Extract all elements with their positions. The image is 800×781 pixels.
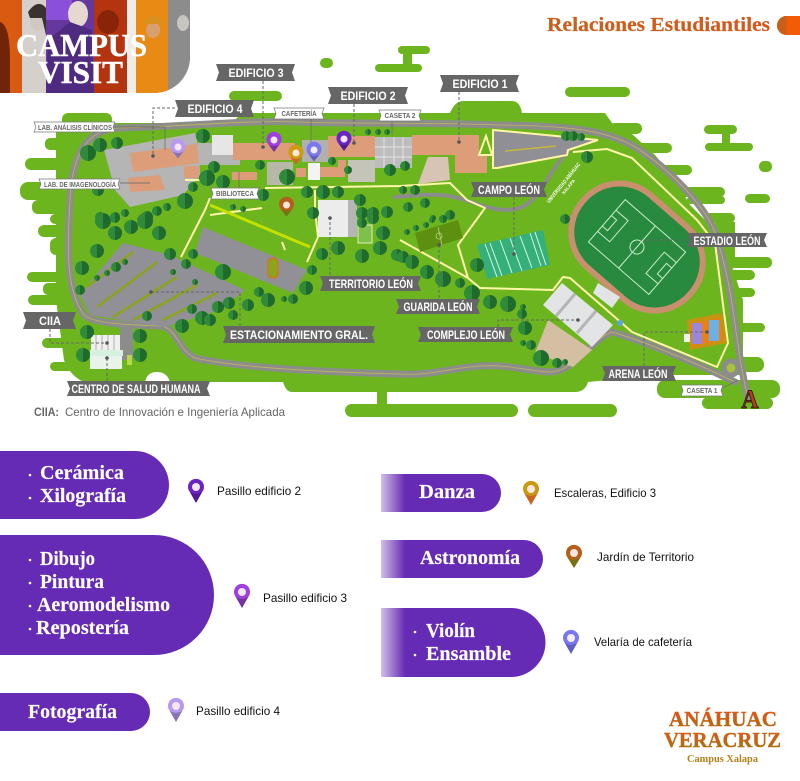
label: lab. de imagenología: [39, 179, 120, 189]
label: campo león: CAMPO LEÓN: [478, 182, 540, 197]
right fingers: [610, 123, 642, 134]
left fingers: [45, 138, 75, 150]
map pin: edificio 4: [170, 139, 186, 158]
green terrain: [20, 46, 780, 417]
trees: [75, 129, 593, 368]
label: edificio 1: EDIFICIO 1: [452, 77, 508, 91]
legend: astronomía: Jardín de Territorio: [597, 550, 694, 564]
leader dots: [105, 140, 709, 360]
label: estadio león: ESTADIO LEÓN: [694, 233, 760, 248]
legend: danza: Escaleras, Edificio 3: [554, 486, 656, 500]
pin: [563, 630, 579, 654]
label: lab. análisis clínicos: [34, 122, 115, 132]
centro de salud buildings: [90, 335, 132, 369]
label: biblioteca: BIBLIOTECA: [216, 191, 254, 198]
label: lab. análisis clínicos: LAB. ANÁLISIS CLÍNICOS: [38, 123, 112, 132]
label: edificio 3: EDIFICIO 3: [228, 66, 284, 80]
legend: velaría de cafetería: [381, 608, 692, 677]
parking lots: [80, 130, 598, 360]
legend: pasillo edificio 4: [0, 693, 280, 731]
yellow-green walkway: [210, 205, 310, 247]
universidad sign: XALAPA: [561, 178, 577, 195]
label: estacionamiento gral.: ESTACIONAMIENTO GRAL.: [230, 328, 368, 342]
universidad sign: UNIVERSIDAD ANÁHUAC: [545, 161, 582, 205]
stadium: [548, 160, 726, 334]
legend: pasillo edificio 3: [0, 535, 347, 655]
main land: [56, 101, 743, 392]
ciia note: CIIA:: [34, 405, 59, 419]
legend: pasillo edificio 2: Xilografía: [40, 486, 126, 507]
label: lab. de imagenología: LAB. DE IMAGENOLOGÍA: [44, 180, 116, 189]
legend: pasillo edificio 2: Cerámica: [40, 463, 124, 484]
legend: pasillo edificio 3: Pintura: [40, 572, 104, 593]
label: edificio 3: [216, 64, 295, 81]
label: edificio 1: [440, 75, 519, 92]
pin: [188, 479, 204, 503]
title: campus visit: VISIT: [38, 54, 123, 90]
legend: pasillo edificio 3: Repostería: [36, 618, 129, 639]
logo: anáhuac veracruz: ANÁHUAC: [669, 707, 777, 731]
walkways: [181, 149, 728, 367]
label: edificio 4: EDIFICIO 4: [188, 102, 243, 116]
ciia note: Centro de Innovación e Ingeniería Aplicada: [65, 405, 285, 419]
legend: pasillo edificio 4: Pasillo edificio 4: [196, 704, 280, 718]
title: campus visit: CAMPUS: [16, 27, 147, 63]
title: campus visit: [16, 27, 147, 90]
label: edificio 2: [328, 87, 408, 104]
legend: pasillo edificio 3: Dibujo: [40, 549, 95, 570]
logo: anáhuac veracruz: [664, 707, 781, 765]
legend: pasillo edificio 3: Aeromodelismo: [37, 595, 170, 616]
legend: pasillo edificio 2: [0, 451, 301, 519]
label: arena león: ARENA LEÓN: [608, 366, 668, 381]
pin: [168, 698, 184, 722]
label: centro de salud humana: CENTRO DE SALUD HUMANA: [72, 382, 201, 396]
label: caseta 1: CASETA 1: [686, 388, 718, 395]
arena león courts: [684, 313, 727, 350]
legend: astronomía: Astronomía: [420, 548, 520, 569]
logo: anáhuac veracruz: VERACRUZ: [664, 728, 781, 752]
heading: relaciones estudiantiles: Relaciones Estudiantiles: [547, 15, 770, 36]
label: ciia: [23, 312, 76, 329]
legend: pasillo edificio 2: Pasillo edificio 2: [217, 484, 301, 498]
accent pill: [777, 16, 800, 35]
map pin: edificio 3: [266, 132, 282, 152]
label: edificio 4: [175, 100, 254, 117]
pin: [234, 584, 250, 608]
label: cafetería: [274, 108, 324, 119]
label: biblioteca: [211, 188, 259, 199]
legend: danza: [381, 474, 656, 512]
roads: [68, 122, 748, 398]
pin: [523, 481, 539, 505]
guarida león field: [415, 220, 463, 252]
legend: danza: Danza: [419, 482, 475, 503]
complejo león: [535, 283, 623, 367]
campus visit header photo: [0, 0, 190, 93]
label: caseta 1: [681, 385, 723, 396]
territorio león building and court: [318, 200, 372, 243]
legend: velaría de cafetería: Violín: [426, 621, 475, 642]
legend: pasillo edificio 3: Pasillo edificio 3: [263, 591, 347, 605]
logo: anáhuac veracruz: Campus Xalapa: [687, 754, 758, 765]
universidad sign: [545, 161, 586, 208]
legend: velaría de cafetería: Ensamble: [426, 644, 511, 665]
legend: velaría de cafetería: Velaría de cafetería: [594, 635, 692, 649]
map pin: edificio 2: [336, 131, 352, 151]
label: territorio león: TERRITORIO LEÓN: [329, 276, 413, 291]
label: caseta 2: CASETA 2: [384, 113, 416, 120]
label: ciia: CIIA: [39, 314, 61, 328]
legend: pasillo edificio 4: Fotografía: [28, 702, 117, 723]
map pin: jardín de territorio: [279, 197, 294, 216]
campo león field: [477, 230, 550, 279]
label: complejo león: COMPLEJO LEÓN: [427, 327, 505, 342]
pin: [566, 545, 582, 568]
icon: anáhuac A: A: [742, 385, 759, 414]
label: edificio 2: EDIFICIO 2: [340, 89, 396, 103]
gray pavement and small plazas: [104, 133, 450, 207]
map pin: velaría: [306, 142, 322, 162]
dashed leaders: [50, 81, 707, 381]
label: guarida león: GUARIDA LEÓN: [404, 299, 472, 314]
label: cafetería: CAFETERÍA: [282, 109, 316, 118]
campus map: [20, 46, 780, 417]
legend: astronomía: [381, 540, 694, 578]
map pin: danza: [288, 145, 304, 164]
buildings: [128, 135, 487, 192]
label: caseta 2: [379, 110, 421, 121]
